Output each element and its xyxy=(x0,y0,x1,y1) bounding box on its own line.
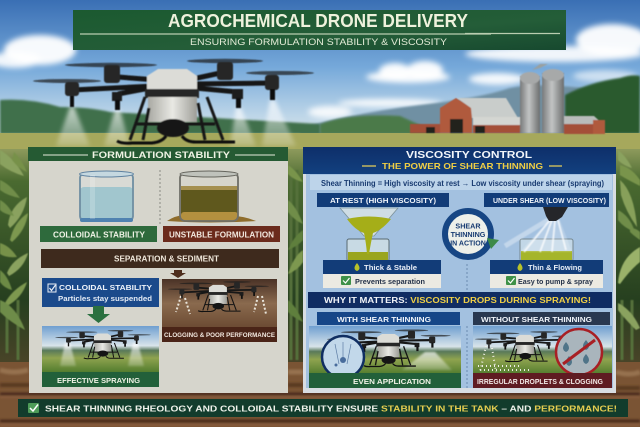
panel header xyxy=(28,147,288,161)
card: without shear thinning: IRREGULAR DROPLETS & CLOGGING xyxy=(477,379,604,386)
label: unstable formulation: UNSTABLE FORMULATION xyxy=(169,230,274,240)
arrow: to effective spraying xyxy=(87,306,110,323)
card: clogging and poor performance: CLOGGING & POOR PERFORMANCE xyxy=(164,332,276,339)
heading: at rest: AT REST (HIGH VISCOSITY) xyxy=(330,196,437,205)
subtitle: ENSURING FORMULATION STABILITY & VISCOSITY xyxy=(190,37,448,48)
dashed centre divider xyxy=(466,264,468,388)
heading: under shear xyxy=(484,193,609,207)
illustration: funnel pouring thick liquid xyxy=(340,208,398,261)
callout: colloidal stability: Particles stay suspended xyxy=(58,294,152,303)
stable beaker xyxy=(80,171,134,222)
unstable beaker with sediment xyxy=(167,171,256,222)
panel: formulation stability xyxy=(28,147,288,393)
barn and silos xyxy=(410,64,605,134)
heading: under shear: UNDER SHEAR (LOW VISCOSITY) xyxy=(493,196,606,205)
badge: shear thinning in action: SHEAR xyxy=(455,222,481,230)
banner: why it matters: WHY IT MATTERS: VISCOSITY DROPS DURING SPRAYING! xyxy=(324,296,591,305)
label: colloidal stability xyxy=(40,226,157,242)
panel header: VISCOSITY CONTROL xyxy=(406,149,533,161)
panel: viscosity control xyxy=(303,147,616,393)
card: without shear thinning xyxy=(473,312,612,388)
card: with shear thinning xyxy=(309,312,461,388)
badge: shear thinning in action: THINNING xyxy=(451,230,486,239)
badge: shear thinning in action xyxy=(445,211,499,257)
definition strip: Shear Thinning = High viscosity at rest → Low viscosity under shear (spraying) xyxy=(321,179,604,188)
box: thin and flowing: Thin & Flowing xyxy=(528,263,582,272)
badge: shear thinning in action: IN ACTION xyxy=(450,240,486,248)
callout: colloidal stability xyxy=(42,278,159,307)
bar: separation and sediment: SEPARATION & SEDIMENT xyxy=(114,254,219,264)
panel header xyxy=(303,147,616,174)
card: with shear thinning: WITH SHEAR THINNING xyxy=(337,315,431,324)
card: clogging and poor performance xyxy=(162,279,277,342)
panel header: THE POWER OF SHEAR THINNING xyxy=(382,161,543,171)
box: thin and flowing: Easy to pump & spray xyxy=(518,277,594,286)
footer banner xyxy=(18,399,628,417)
card: with shear thinning: EVEN APPLICATION xyxy=(353,377,431,386)
label: unstable formulation xyxy=(163,226,280,242)
illustration: nozzle spraying thin liquid xyxy=(505,207,573,261)
box: thick and stable: Prevents separation xyxy=(355,277,425,286)
title: AGROCHEMICAL DRONE DELIVERY xyxy=(168,10,469,31)
card: effective spraying xyxy=(42,326,159,387)
banner: why it matters xyxy=(308,292,612,308)
icon: check mark xyxy=(28,403,39,413)
panel header: FORMULATION STABILITY xyxy=(92,150,231,161)
arrow: to clogging xyxy=(170,270,186,278)
card: without shear thinning: WITHOUT SHEAR THINNING xyxy=(481,315,592,324)
bar: separation and sediment xyxy=(41,249,279,268)
heading: at rest xyxy=(317,193,449,207)
box: thin and flowing xyxy=(490,260,603,288)
card: effective spraying: EFFECTIVE SPRAYING xyxy=(57,376,140,385)
title banner xyxy=(73,10,566,50)
definition strip xyxy=(310,175,612,190)
label: colloidal stability: COLLOIDAL STABILITY xyxy=(53,230,146,240)
callout: colloidal stability: COLLOIDAL STABILITY xyxy=(59,283,152,292)
footer text: SHEAR THINNING RHEOLOGY AND COLLOIDAL STABILITY ENSURE STABILITY IN THE TANK – AND PERFORMANCE! xyxy=(45,404,617,414)
box: thick and stable xyxy=(323,260,441,288)
divider xyxy=(159,170,161,226)
main agricultural drone with sprays xyxy=(33,59,314,146)
box: thick and stable: Thick & Stable xyxy=(364,263,417,272)
